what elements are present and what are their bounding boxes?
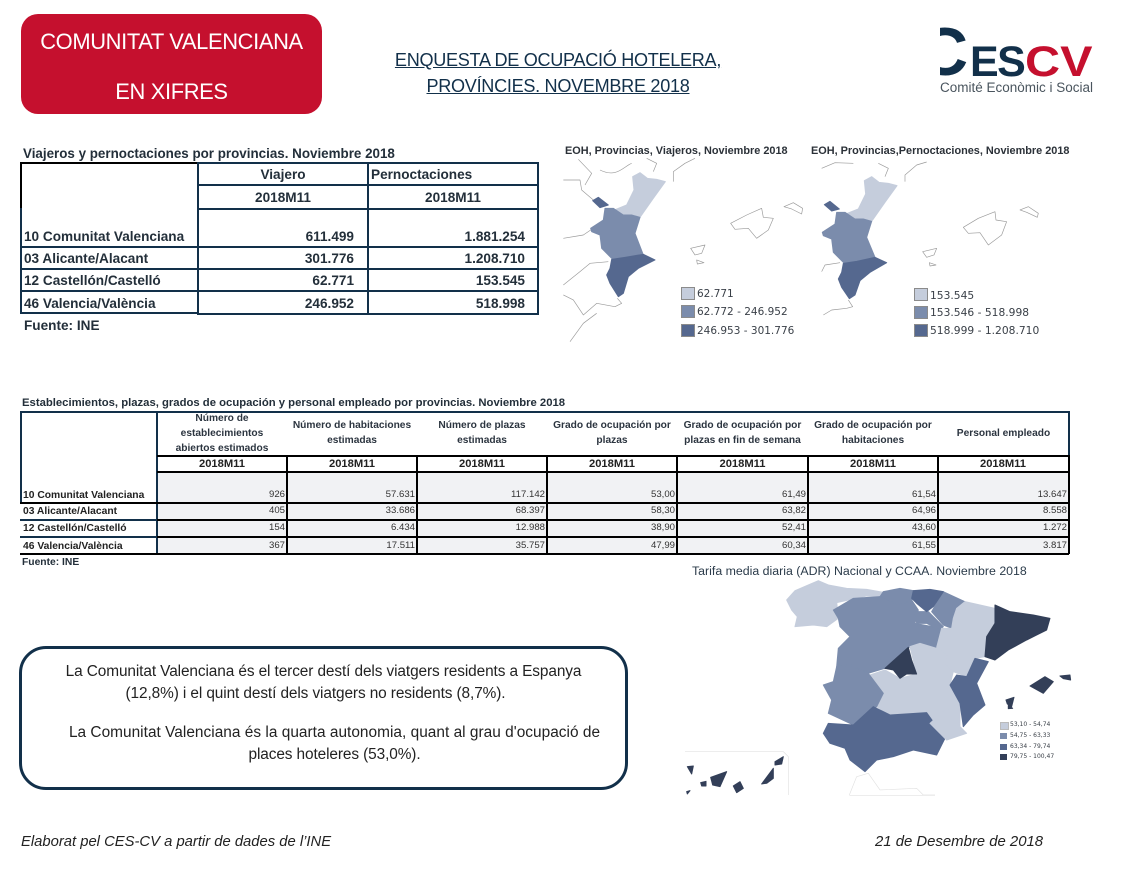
table: establecimientos, plazas, ocupación y personal: 17.511 [386,540,415,551]
badge: Comunitat Valenciana en xifres: EN XIFRES [115,79,228,104]
table: establecimientos, plazas, ocupación y personal: 68.397 [516,505,545,516]
legend: viajeros: 246.953 - 301.776 [697,325,794,337]
table: viajeros y pernoctaciones: Pernoctaciones [371,167,472,182]
table: establecimientos, plazas, ocupación y personal: 2018M11 [589,458,635,470]
table: establecimientos, plazas, ocupación y personal: estimadas [457,435,507,446]
legend: viajeros: 62.771 [697,288,734,300]
table: establecimientos, plazas, ocupación y personal: 367 [269,540,285,551]
table: establecimientos, plazas, ocupación y personal: 13.647 [1038,489,1067,500]
source: table 2: Fuente: INE [22,557,79,568]
footer: date: 21 de Desembre de 2018 [875,834,1043,850]
table: establecimientos, plazas, ocupación y personal: 2018M11 [459,458,505,470]
legend: ADR: 79,75 - 100,47 [1010,753,1054,760]
table: establecimientos, plazas, ocupación y personal: 46 Valencia/València [23,541,123,552]
table: viajeros y pernoctaciones [20,162,539,315]
table: establecimientos, plazas, ocupación y personal: Personal empleado [957,428,1050,439]
logo: CES CV [940,20,1093,95]
table: establecimientos, plazas, ocupación y personal: plazas [596,435,628,446]
table: viajeros y pernoctaciones: 246.952 [305,296,354,311]
table: establecimientos, plazas, ocupación y personal: 117.142 [511,489,545,500]
table: establecimientos, plazas, ocupación y personal: 6.434 [391,522,415,533]
table: viajeros y pernoctaciones: Viajero [260,167,306,182]
table: establecimientos, plazas, ocupación y personal: 10 Comunitat Valenciana [23,490,144,501]
legend: pernoctaciones: 518.999 - 1.208.710 [930,324,1039,337]
table: establecimientos, plazas, ocupación y personal: 61,54 [912,489,936,500]
table: establecimientos, plazas, ocupación y personal: Grado de ocupación por [814,420,932,431]
table: establecimientos, plazas, ocupación y personal: 61,55 [912,540,936,551]
heading: table 2: Establecimientos, plazas, grados de ocupación y personal empleado por provincias. Noviembre 2018 [22,397,565,409]
table: establecimientos, plazas, ocupación y personal: 1.272 [1043,522,1067,533]
table: establecimientos, plazas, ocupación y personal: establecimientos [181,428,263,439]
title: PROVÍNCIES. NOVEMBRE 2018 [426,76,690,96]
table: establecimientos, plazas, ocupación y personal: 2018M11 [850,458,896,470]
table: viajeros y pernoctaciones: 62.771 [312,273,354,288]
table: viajeros y pernoctaciones: 2018M11 [255,190,311,205]
callout: key findings [19,646,628,790]
table: establecimientos, plazas, ocupación y personal: Grado de ocupación por [684,420,801,431]
source: table 1: Fuente: INE [24,318,100,333]
legend: ADR: 54,75 - 63,33 [1010,732,1050,739]
table: establecimientos, plazas, ocupación y personal: 12.988 [516,522,545,533]
callout: key findings: La Comunitat Valenciana és la quarta autonomia, quant al grau d'ocupació de [69,724,600,741]
legend: ADR [1000,721,1054,760]
callout: key findings: (12,8%) i el quint destí dels viatgers no residents (8,7%). [126,685,505,702]
table: establecimientos, plazas, ocupación y personal: 12 Castellón/Castelló [23,523,127,534]
table: establecimientos, plazas, ocupación y personal: 43,60 [912,522,936,533]
title: ENQUESTA DE OCUPACIÓ HOTELERA, [395,50,721,70]
table: viajeros y pernoctaciones: 2018M11 [425,190,481,205]
table: viajeros y pernoctaciones: 46 Valencia/València [24,296,156,311]
table: establecimientos, plazas, ocupación y personal: 154 [269,522,285,533]
table: establecimientos, plazas, ocupación y personal: 03 Alicante/Alacant [23,506,117,517]
table: establecimientos, plazas, ocupación y personal: 58,30 [651,505,675,516]
title [394,50,722,96]
callout: key findings: La Comunitat Valenciana és el tercer destí dels viatgers residents a Espanya [66,663,581,680]
table: establecimientos, plazas, ocupación y personal: Número de plazas [438,420,526,431]
footer: source credit: Elaborat pel CES-CV a partir de dades de l’INE [21,834,331,850]
table: establecimientos, plazas, ocupación y personal: 3.817 [1043,540,1067,551]
legend: ADR: 53,10 - 54,74 [1010,721,1050,728]
map title: pernoctaciones: EOH, Provincias,Pernoctaciones, Noviembre 2018 [811,145,1069,157]
table: establecimientos, plazas, ocupación y personal: 64,96 [912,505,936,516]
table: establecimientos, plazas, ocupación y personal: 2018M11 [719,458,766,470]
legend: ADR: 63,34 - 79,74 [1010,743,1050,750]
table: establecimientos, plazas, ocupación y personal: 52,41 [782,522,806,533]
heading: table 1: Viajeros y pernoctaciones por provincias. Noviembre 2018 [23,146,395,161]
table: establecimientos, plazas, ocupación y personal: 53,00 [651,489,675,500]
map title: viajeros: EOH, Provincias, Viajeros, Noviembre 2018 [565,145,788,157]
table: viajeros y pernoctaciones: 12 Castellón/Castelló [24,273,161,288]
table: establecimientos, plazas, ocupación y personal: plazas en fin de semana [684,435,801,446]
table: establecimientos, plazas, ocupación y personal: 405 [269,505,285,516]
legend: viajeros [681,287,794,337]
table: establecimientos, plazas, ocupación y personal: habitaciones [842,435,904,446]
table: establecimientos, plazas, ocupación y personal: Número de habitaciones [293,420,411,431]
table: establecimientos, plazas, ocupación y personal: Grado de ocupación por [553,420,671,431]
table: viajeros y pernoctaciones: 153.545 [476,273,525,288]
table: establecimientos, plazas, ocupación y personal [20,411,1070,555]
table: establecimientos, plazas, ocupación y personal: 2018M11 [329,458,375,470]
table: viajeros y pernoctaciones: 10 Comunitat Valenciana [24,229,184,244]
legend: pernoctaciones: 153.546 - 518.998 [930,306,1029,319]
map title: ADR: Tarifa media diaria (ADR) Nacional y CCAA. Noviembre 2018 [692,564,1027,578]
table: establecimientos, plazas, ocupación y personal: 38,90 [651,522,675,533]
logo: CES CV: CV [1025,38,1092,86]
table: establecimientos, plazas, ocupación y personal: 57.631 [386,489,415,500]
table: establecimientos, plazas, ocupación y personal: 47,99 [651,540,675,551]
table: establecimientos, plazas, ocupación y personal: 8.558 [1043,505,1067,516]
table: establecimientos, plazas, ocupación y personal: estimadas [327,435,377,446]
table: viajeros y pernoctaciones: 1.208.710 [465,251,525,266]
table: establecimientos, plazas, ocupación y personal: 926 [269,489,285,500]
table: establecimientos, plazas, ocupación y personal: 2018M11 [199,458,245,470]
table: establecimientos, plazas, ocupación y personal: 2018M11 [980,458,1026,470]
table: establecimientos, plazas, ocupación y personal: abiertos estimados [176,443,268,454]
callout: key findings: places hoteleres (53,0%). [248,746,421,763]
table: establecimientos, plazas, ocupación y personal: 35.757 [516,540,545,551]
legend: viajeros: 62.772 - 246.952 [697,306,788,318]
badge: Comunitat Valenciana en xifres [21,14,322,114]
table: establecimientos, plazas, ocupación y personal: 61,49 [782,489,806,500]
table: viajeros y pernoctaciones: 611.499 [306,229,354,244]
logo: CES CV: Comité Econòmic i Social [940,80,1093,95]
legend: pernoctaciones: 153.545 [930,289,974,302]
table: viajeros y pernoctaciones: 1.881.254 [465,229,525,244]
table: establecimientos, plazas, ocupación y personal: 60,34 [782,540,806,551]
table: viajeros y pernoctaciones: 518.998 [476,296,525,311]
table: establecimientos, plazas, ocupación y personal: 33.686 [386,505,415,516]
table: viajeros y pernoctaciones: 03 Alicante/Alacant [24,251,148,266]
badge: Comunitat Valenciana en xifres: COMUNITAT VALENCIANA [40,29,303,54]
table: establecimientos, plazas, ocupación y personal: 63,82 [782,505,806,516]
legend: pernoctaciones [914,288,1039,337]
table: establecimientos, plazas, ocupación y personal: Número de [195,413,249,424]
table: viajeros y pernoctaciones: 301.776 [305,251,354,266]
logo: CES CV: ES [970,38,1024,86]
